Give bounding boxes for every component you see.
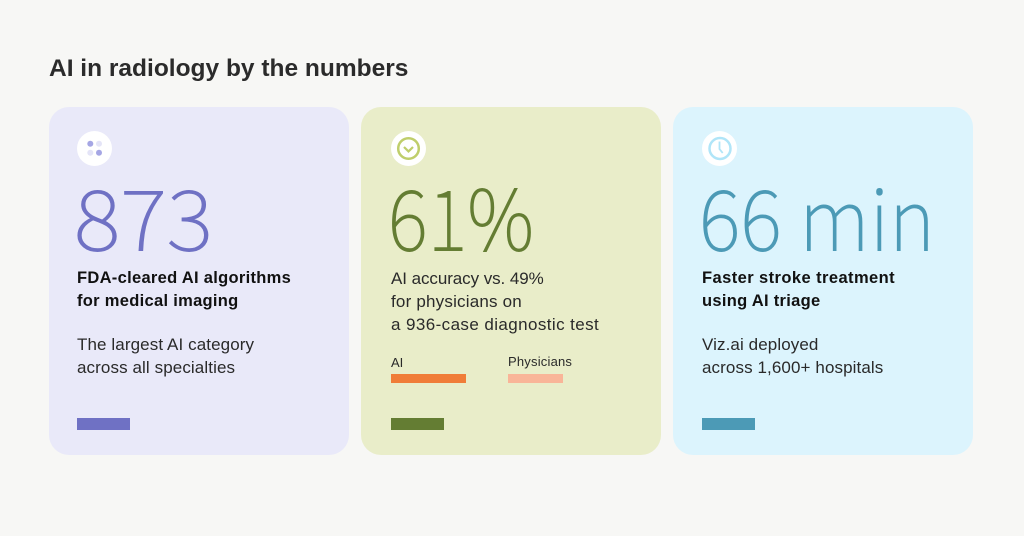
description: largest category: across all specialties bbox=[77, 358, 235, 376]
icon: clock bbox=[702, 131, 737, 166]
big number: 61%: 61% bbox=[388, 154, 534, 276]
big number: 66 min: 66 min bbox=[699, 154, 935, 276]
description: Viz.ai: across 1,600+ hospitals bbox=[702, 358, 883, 376]
panel: FDA algorithms bbox=[49, 107, 349, 455]
description: largest category bbox=[77, 335, 254, 376]
legend: AI: AI bbox=[391, 355, 403, 370]
heading: faster stroke treatment bbox=[702, 269, 895, 310]
legend: Physicians bbox=[508, 354, 572, 383]
accent bar bbox=[702, 418, 755, 430]
title: AI in radiology by the numbers bbox=[49, 55, 408, 82]
legend: AI bbox=[391, 355, 466, 383]
description: AI accuracy: for physicians on bbox=[391, 292, 522, 311]
description: Viz.ai bbox=[702, 335, 883, 376]
icon: check circle bbox=[391, 131, 426, 166]
description: AI accuracy: AI accuracy vs. 49% bbox=[391, 269, 544, 288]
description: AI accuracy: a 936-case diagnostic test bbox=[391, 315, 599, 334]
accent bar bbox=[391, 418, 444, 430]
panel: accuracy bbox=[361, 107, 661, 455]
big number: 873: 873 bbox=[74, 154, 213, 276]
heading: faster stroke treatment: Faster stroke treatment bbox=[702, 269, 895, 287]
heading: FDA-cleared: FDA-cleared AI algorithms bbox=[77, 269, 291, 287]
legend: Physicians: Physicians bbox=[508, 354, 572, 369]
description: Viz.ai: Viz.ai deployed bbox=[702, 335, 818, 354]
description: largest category: The largest AI category bbox=[77, 335, 254, 354]
description: AI accuracy bbox=[391, 269, 599, 334]
panel: stroke treatment bbox=[673, 107, 973, 455]
heading: FDA-cleared bbox=[77, 269, 291, 310]
heading: faster stroke treatment: using AI triage bbox=[702, 292, 820, 310]
icon: four dots bbox=[77, 131, 112, 166]
accent bar bbox=[77, 418, 130, 430]
heading: FDA-cleared: for medical imaging bbox=[77, 292, 239, 310]
